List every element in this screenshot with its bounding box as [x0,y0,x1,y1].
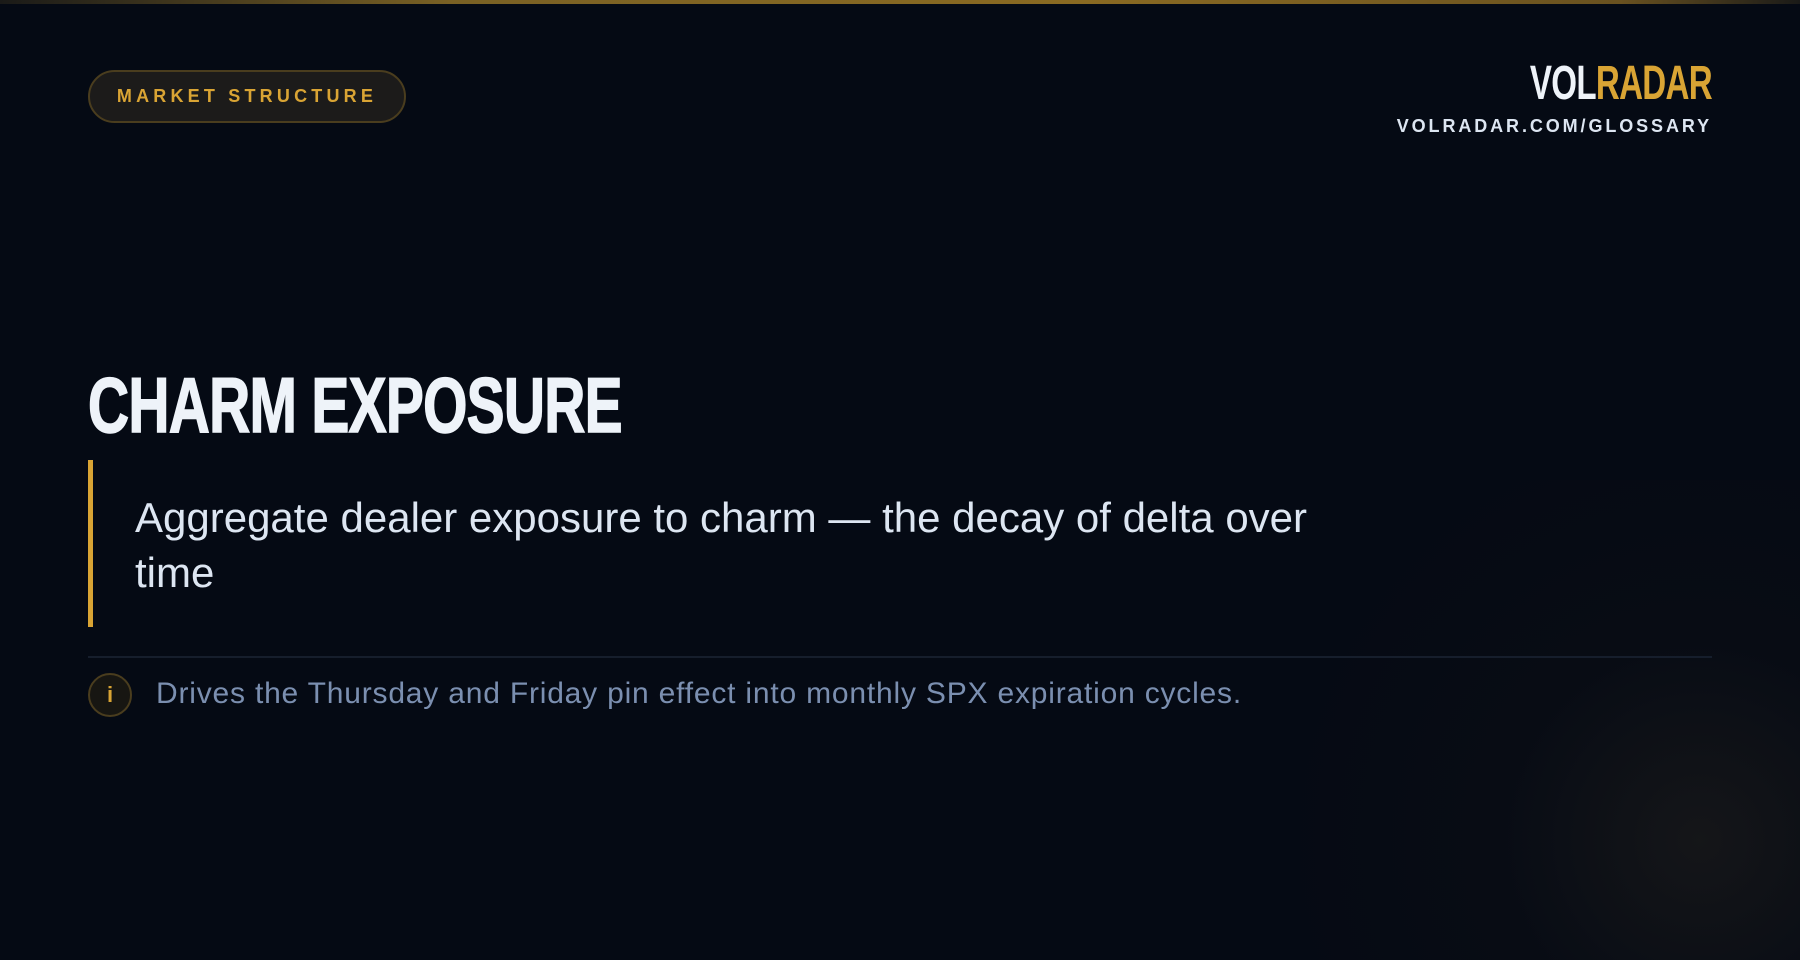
logo url: VOLRADAR.COM/GLOSSARY [1397,116,1712,136]
note with info icon [88,673,1242,717]
note text: Drives the Thursday and Friday pin effect into monthly SPX expiration cycles. [156,677,1242,710]
title: CHARM EXPOSURE [88,361,622,449]
logo: VOLRADAR: VOLRADAR [1530,57,1712,110]
definition quote [88,460,1388,627]
definition quote: Aggregate dealer exposure to charm — the decay of delta over [135,494,1307,541]
icon: info [88,673,132,717]
badge: market structure [88,70,406,123]
icon: info: i [107,682,113,707]
definition quote: time [135,549,214,596]
badge: market structure: MARKET STRUCTURE [117,86,377,106]
